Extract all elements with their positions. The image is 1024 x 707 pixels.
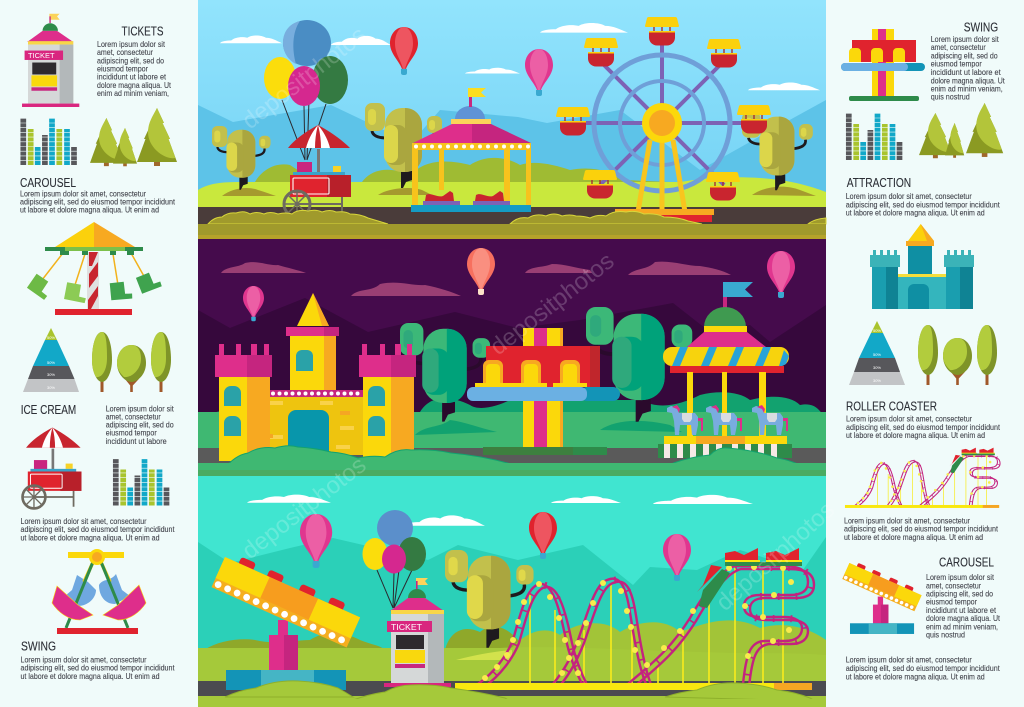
text: tickets: Lorem ipsum dolor sit xyxy=(97,39,166,49)
heading: ice cream: ICE CREAM xyxy=(21,403,76,417)
cloud group xyxy=(247,495,753,526)
icon: teal castle xyxy=(870,224,974,309)
green tree xyxy=(400,323,490,422)
icon: chair swing carousel xyxy=(26,222,162,315)
text: swing: Lorem ipsum dolor sit xyxy=(931,34,999,44)
castle xyxy=(215,293,416,461)
text: tickets: adipiscing elit, sed do xyxy=(97,55,164,65)
icon: pine trees xyxy=(90,108,177,166)
icon: ice cream cart xyxy=(23,428,81,508)
ferris wheel xyxy=(556,17,771,222)
heading: swing: SWING xyxy=(21,640,56,654)
icon: pirate ship swing xyxy=(52,549,146,634)
night mountains xyxy=(198,298,826,430)
text: carousel: eiusmod tempor xyxy=(926,597,977,607)
text: carousel: Lorem ipsum dolor sit xyxy=(926,572,995,582)
text: swing: Lorem ipsum dolor sit amet, consectetur xyxy=(20,654,147,664)
text: carousel detail: ut labore et dolore magna aliqua. Ut enim ad xyxy=(846,671,985,681)
text: tickets xyxy=(97,39,171,98)
carousel xyxy=(658,282,792,458)
night foreground bushes xyxy=(198,446,826,476)
text: swing: amet, consectetur xyxy=(931,42,986,52)
scene: night park xyxy=(198,239,826,476)
text: swing xyxy=(931,34,1005,101)
ticket booth xyxy=(384,578,451,687)
text: ice cream detail: adipiscing elit, sed do eiusmod tempor incididunt xyxy=(20,524,175,534)
text: swing: adipiscing elit, sed do xyxy=(931,50,998,60)
bar chart xyxy=(23,118,74,165)
mountains xyxy=(198,537,826,660)
text: attraction: ut labore et dolore magna aliqua. Ut enim ad xyxy=(846,208,985,218)
mountains xyxy=(198,100,826,195)
text: carousel: amet, consectetur xyxy=(926,580,981,590)
text: swing: quis nostrud xyxy=(931,91,970,101)
scene: teal park xyxy=(198,476,826,707)
text: ice cream: incididunt ut labore xyxy=(106,436,167,446)
text: tickets: enim ad minim veniam, xyxy=(97,88,169,98)
text: swing: ut labore et dolore magna aliqua. Ut enim ad xyxy=(20,671,160,681)
text: carousel: adipiscing elit, sed do xyxy=(926,589,993,599)
foreground bushes xyxy=(225,681,815,701)
heading: carousel: CAROUSEL xyxy=(20,176,76,190)
icon: ticket booth xyxy=(22,14,79,107)
heading: attraction: ATTRACTION xyxy=(847,176,911,190)
icon: round trees xyxy=(918,325,997,385)
text: roller coaster: ut labore et dolore magna aliqua. Ut enim ad xyxy=(846,430,985,440)
chart: pyramid: 50% xyxy=(47,335,55,340)
heading: swing: SWING xyxy=(964,21,998,35)
text: ice cream xyxy=(106,403,174,446)
tree xyxy=(365,103,442,188)
tree xyxy=(445,550,534,648)
hot air balloons xyxy=(390,27,553,96)
watermark: depositphotos xyxy=(237,451,371,565)
text: ice cream: Lorem ipsum dolor sit xyxy=(106,403,174,413)
chart: pyramid xyxy=(849,321,905,385)
text: attraction xyxy=(846,191,1000,218)
text: ice cream detail: Lorem ipsum dolor sit amet, consectetur xyxy=(20,516,147,526)
watermark: depositphotos xyxy=(237,21,371,135)
text: carousel xyxy=(20,189,176,215)
text: swing: incididunt ut labore et xyxy=(931,67,1001,77)
night clouds xyxy=(221,262,731,296)
text: carousel: dolore magna aliqua. Ut xyxy=(926,613,1000,623)
chart: pyramid xyxy=(23,328,79,392)
chart: pyramid: 50% xyxy=(47,360,55,365)
bar chart xyxy=(116,458,166,506)
ground and bushes xyxy=(198,158,826,224)
text: roller coaster detail: adipiscing elit, sed do eiusmod tempor incididunt xyxy=(844,524,999,534)
icon: roller coaster xyxy=(845,448,1000,508)
icon: round trees xyxy=(92,332,171,392)
text: roller coaster detail: ut labore et dolore magna aliqua. Ut enim ad xyxy=(844,532,983,542)
text: carousel detail: Lorem ipsum dolor sit amet, consectetur xyxy=(846,655,972,665)
night ground xyxy=(198,392,826,463)
panel: left column xyxy=(20,14,177,681)
bumper car pavilion xyxy=(411,88,531,212)
text: roller coaster detail xyxy=(844,515,999,542)
text: tickets: dolore magna aliqua. Ut xyxy=(97,80,171,90)
balloon bunch xyxy=(362,510,426,608)
chart: pyramid: 30% xyxy=(47,372,55,377)
chart: pyramid: 30% xyxy=(873,365,881,370)
text: carousel: enim ad minim veniam, xyxy=(926,621,998,631)
text: carousel: incididunt ut labore et xyxy=(926,605,997,615)
text: carousel detail xyxy=(846,655,1000,681)
text: roller coaster detail: Lorem ipsum dolor sit amet, consectetur xyxy=(844,515,970,525)
text: ice cream detail: ut labore et dolore magna aliqua. Ut enim ad xyxy=(20,532,160,542)
tree xyxy=(212,126,271,190)
swing tower xyxy=(467,328,620,455)
icon: swing tower xyxy=(841,29,925,101)
text: swing: dolore magna aliqua. Ut xyxy=(931,75,1005,85)
cloud group xyxy=(220,23,820,90)
text: carousel: Lorem ipsum dolor sit amet, consectetur xyxy=(20,189,146,199)
text: tickets: incididunt ut labore et xyxy=(97,72,167,82)
text: carousel: quis nostrud xyxy=(926,629,965,639)
balloon bunch xyxy=(264,20,348,160)
chart: pyramid: 50% xyxy=(873,352,881,357)
chart: pyramid: 50% xyxy=(873,328,881,333)
text: ice cream: eiusmod tempor xyxy=(106,428,157,438)
text: swing: eiusmod tempor xyxy=(931,59,982,69)
green tree xyxy=(586,307,692,422)
panel: right column xyxy=(841,21,1005,681)
roller coaster xyxy=(455,548,814,690)
watermark: depositphotos xyxy=(485,247,619,361)
text: roller coaster: Lorem ipsum dolor sit amet, consectetur xyxy=(846,414,972,424)
chart: pyramid: 30% xyxy=(873,378,881,383)
ice cream cart xyxy=(284,125,351,217)
icon: tilted ride xyxy=(842,560,923,634)
text: attraction: Lorem ipsum dolor sit amet, consectetur xyxy=(846,191,972,201)
scene: daytime park xyxy=(198,0,826,239)
heading: roller coaster: ROLLER COASTER xyxy=(846,400,937,414)
chart: pyramid: 30% xyxy=(47,385,55,390)
icon: pine trees xyxy=(919,103,1003,158)
text: carousel xyxy=(926,572,1000,639)
tree xyxy=(742,112,813,190)
text: ice cream: amet, consectetur xyxy=(106,411,161,421)
ground and bushes xyxy=(198,620,826,707)
heading: carousel: CAROUSEL xyxy=(939,556,994,570)
text: swing xyxy=(20,654,175,681)
text: carousel: adipiscing elit, sed do eiusmod tempor incididunt xyxy=(20,197,176,207)
night balloons xyxy=(243,248,795,321)
text: carousel: ut labore et dolore magna aliqua. Ut enim ad xyxy=(20,205,159,215)
text: tickets: amet, consectetur xyxy=(97,47,153,57)
watermark: depositphotos xyxy=(711,496,840,616)
text: ice cream detail xyxy=(20,516,175,542)
bar chart xyxy=(849,113,900,160)
foreground bushes xyxy=(198,210,826,239)
watermark xyxy=(237,21,840,616)
text: roller coaster xyxy=(846,414,1001,440)
tilted ride xyxy=(212,551,363,690)
heading: tickets: TICKETS xyxy=(122,24,164,38)
text: swing: enim ad minim veniam, xyxy=(931,83,1003,93)
hot air balloons xyxy=(300,512,691,581)
text: swing: adipiscing elit, sed do eiusmod tempor incididunt xyxy=(20,663,175,673)
text: tickets: eiusmod tempor xyxy=(97,64,148,74)
text: ice cream: adipiscing elit, sed do xyxy=(106,419,174,429)
